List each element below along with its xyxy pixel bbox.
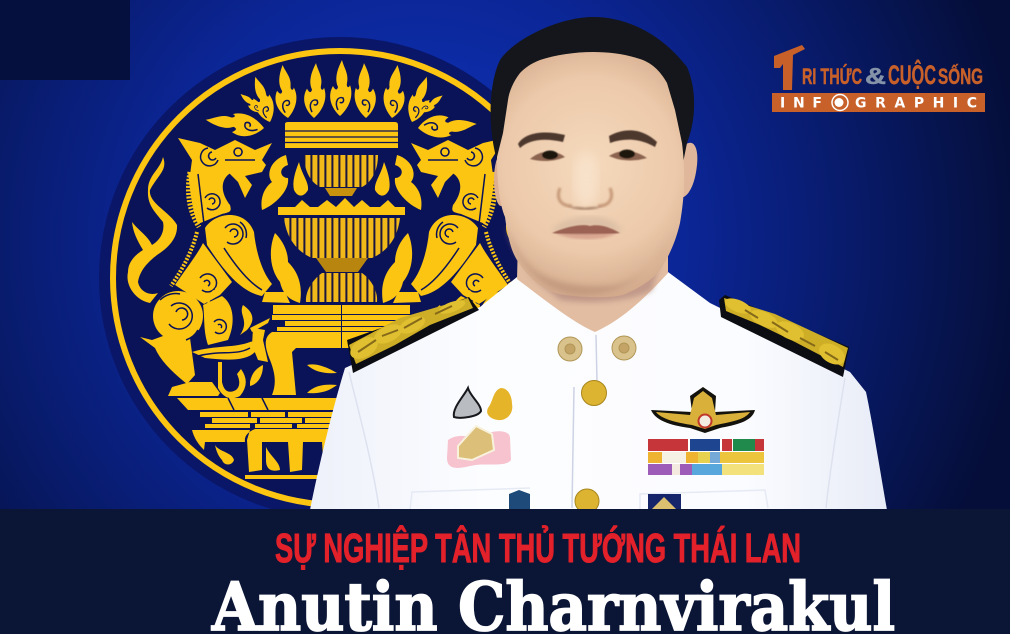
seal disc (113, 51, 567, 505)
right pocket badge (648, 494, 681, 509)
face (497, 52, 684, 297)
eyebrow right (609, 130, 657, 147)
portrait of Anutin Charnvirakul (310, 17, 887, 513)
stubble (552, 217, 622, 232)
gold badge (487, 388, 512, 420)
jacket creases (349, 372, 845, 508)
logo wordmark second: CUỘC (888, 59, 936, 90)
lower button (575, 489, 599, 513)
logo band text right: GRAPHIC (855, 96, 977, 112)
lower bowl (306, 273, 377, 302)
pocket flaps (410, 488, 768, 510)
mouth (552, 225, 620, 235)
right guardian (342, 138, 556, 479)
nose highlight (574, 152, 598, 208)
dark corner patch (0, 0, 130, 80)
logo ampersand: & (865, 63, 886, 89)
wings badge (651, 387, 755, 433)
left epaulette (347, 297, 479, 373)
jaw shadow (505, 225, 672, 295)
neck shadow (526, 262, 660, 302)
lotus row (278, 198, 405, 215)
black drop badge (454, 388, 481, 418)
logo O icon (832, 94, 848, 110)
left guardian (127, 138, 341, 479)
seal halo (99, 37, 581, 519)
emblem seal (99, 37, 581, 519)
front placket (572, 335, 597, 508)
logo: Tri Thuc & Cuoc Song Infographic (772, 45, 985, 112)
ribbon bar (648, 439, 764, 475)
hair (491, 17, 694, 168)
logo wordmark third: SỐNG (938, 63, 983, 89)
ceremonial bowl stack (278, 122, 405, 302)
nose wings (558, 188, 612, 206)
logo band (772, 93, 985, 112)
ear left (494, 154, 508, 206)
pink bow badge (447, 426, 511, 468)
top tray (285, 122, 398, 148)
eye left (530, 150, 565, 161)
nose shadow (562, 202, 608, 210)
stem (316, 258, 368, 272)
lower lip (556, 234, 616, 239)
eye right (609, 150, 647, 160)
upper button (582, 380, 606, 406)
flame crown (204, 60, 478, 140)
upper bowl (304, 155, 378, 187)
bottom title band (0, 509, 1010, 634)
logo wordmark: RI THỨC (802, 64, 862, 89)
right epaulette (719, 295, 849, 377)
ear right (680, 143, 697, 198)
middle bowl (284, 218, 400, 258)
jacket (310, 260, 887, 510)
blue pocket badge (509, 490, 530, 509)
collar pins (558, 336, 636, 361)
logo T mark (774, 45, 805, 90)
eyebrow left (518, 132, 565, 148)
logo band text left: INF (780, 96, 822, 112)
neck (517, 230, 668, 332)
